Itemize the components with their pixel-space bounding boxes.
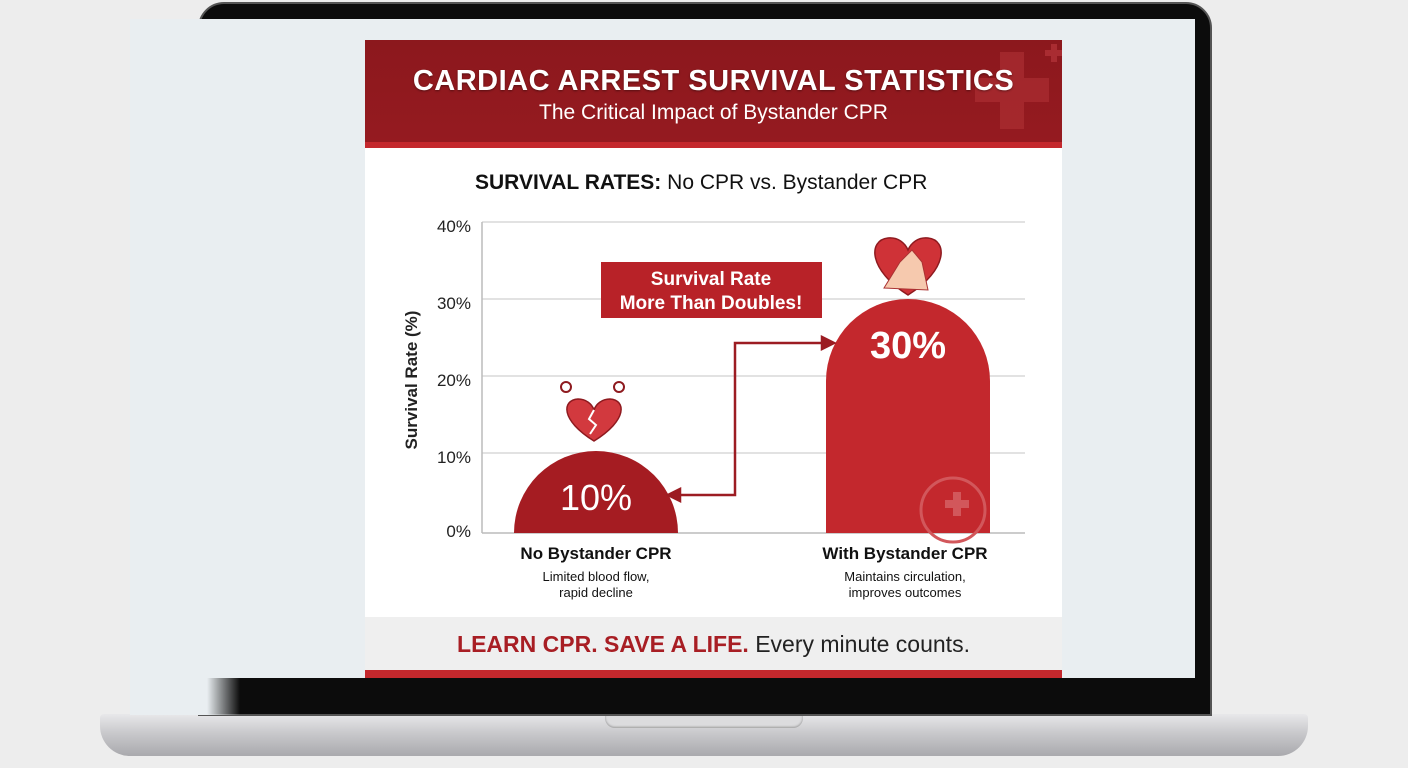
callout	[601, 262, 822, 318]
bar: with CPR	[826, 299, 990, 542]
category labels	[520, 544, 988, 600]
arrow	[668, 337, 834, 501]
camera notch	[637, 10, 772, 38]
category labels: rapid decline	[559, 585, 633, 600]
left screen extension	[130, 670, 240, 715]
laptop base	[100, 714, 1308, 756]
axis labels: 10%	[437, 448, 471, 467]
axis labels: 20%	[437, 371, 471, 390]
footer: LEARN CPR. SAVE A LIFE. Every minute counts.	[457, 631, 970, 657]
header	[365, 40, 1062, 148]
subtitle: The Critical Impact of Bystander CPR	[539, 101, 888, 124]
axis title: Survival Rate (%)	[402, 311, 421, 449]
category labels: Maintains circulation,	[844, 569, 966, 584]
infographic	[365, 40, 1062, 678]
bar: no CPR	[514, 451, 678, 533]
title: CARDIAC ARREST SURVIVAL STATISTICS	[413, 65, 1014, 97]
axis labels: 40%	[437, 217, 471, 236]
callout: Survival Rate	[651, 269, 771, 290]
bar: with CPR: 30%	[870, 325, 946, 367]
bar: no CPR: 10%	[560, 477, 632, 518]
category labels: With Bystander CPR	[822, 544, 988, 563]
footer	[365, 617, 1062, 678]
icon: heart with hands	[875, 238, 941, 295]
icon: broken heart	[561, 382, 624, 441]
category labels: improves outcomes	[849, 585, 962, 600]
screen	[130, 19, 1195, 678]
laptop bezel	[198, 2, 1212, 716]
icon: decorative cross	[975, 44, 1062, 129]
category labels: No Bystander CPR	[520, 544, 672, 563]
callout: More Than Doubles!	[620, 293, 802, 314]
axis labels	[437, 217, 471, 541]
axis labels: 0%	[446, 522, 471, 541]
chart heading: SURVIVAL RATES: No CPR vs. Bystander CPR	[475, 171, 927, 194]
axis labels: 30%	[437, 294, 471, 313]
category labels: Limited blood flow,	[543, 569, 649, 584]
laptop notch on base	[605, 714, 803, 728]
